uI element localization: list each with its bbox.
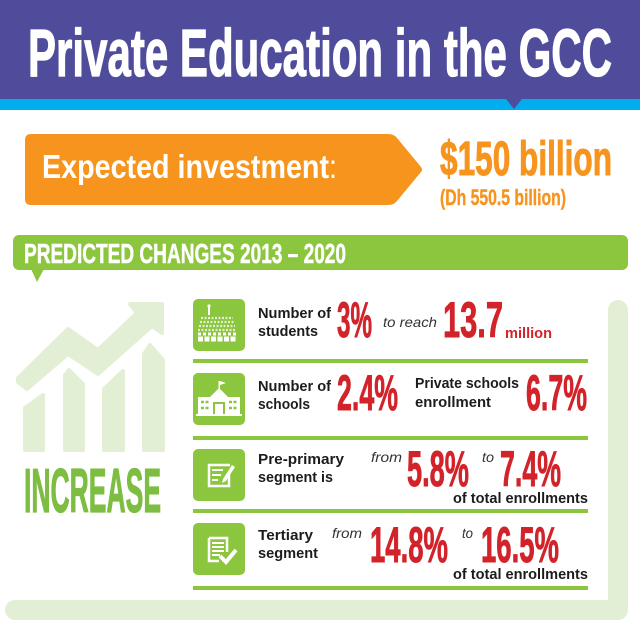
panel: expected investment arrow (25, 134, 422, 205)
icon: students (193, 299, 245, 351)
row: number of schools (193, 365, 587, 425)
row: number of schools: Number of (258, 379, 331, 395)
row: number of schools: enrollment (415, 395, 491, 411)
investment amount: (Dh 550.5 billion) (440, 185, 566, 210)
row: pre-primary segment: from (371, 449, 402, 465)
text: INCREASE (24, 457, 161, 526)
row: number of schools: 2.4% (337, 365, 398, 421)
row: tertiary segment: Tertiary (258, 528, 313, 544)
row: number of students: million (505, 326, 552, 342)
expected investment label: Expected investment: (42, 148, 337, 185)
icon: form with pencil (193, 449, 245, 501)
row: tertiary segment: to (462, 525, 473, 541)
row: pre-primary segment (193, 441, 588, 507)
header banner (0, 0, 640, 110)
row: number of students: 13.7 (443, 292, 503, 348)
row: number of schools: Private schools (415, 376, 519, 392)
row: tertiary segment: segment (258, 546, 318, 562)
row: number of students (193, 292, 552, 351)
panel: predicted changes heading (13, 235, 628, 282)
row: number of schools: schools (258, 397, 310, 413)
row: pre-primary segment: Pre-primary (258, 452, 344, 468)
row: tertiary segment (193, 517, 588, 583)
icon: school (193, 373, 245, 425)
row: pre-primary segment: segment is (258, 470, 333, 486)
row: pre-primary segment: to (482, 449, 494, 465)
row: pre-primary segment: 5.8% (407, 441, 469, 497)
row: number of students: Number of (258, 306, 331, 322)
row: tertiary segment: 16.5% (481, 517, 559, 573)
row: number of students: students (258, 324, 318, 340)
row: tertiary segment: 14.8% (370, 517, 448, 573)
row: pre-primary segment: 7.4% (500, 441, 561, 497)
investment amount (440, 133, 612, 210)
icon: document with check (193, 523, 245, 575)
row: number of students: to reach (383, 314, 437, 330)
row: number of students: 3% (337, 292, 372, 348)
light green frame (5, 300, 628, 620)
row: tertiary segment: from (332, 525, 362, 541)
row: pre-primary segment: of total enrollments (453, 491, 588, 507)
row: tertiary segment: of total enrollments (453, 567, 588, 583)
row: number of schools: 6.7% (526, 365, 587, 421)
panel: predicted changes heading: PREDICTED CHANGES 2013 – 2020 (24, 238, 346, 269)
icon: rising chart with arrow (18, 304, 163, 450)
